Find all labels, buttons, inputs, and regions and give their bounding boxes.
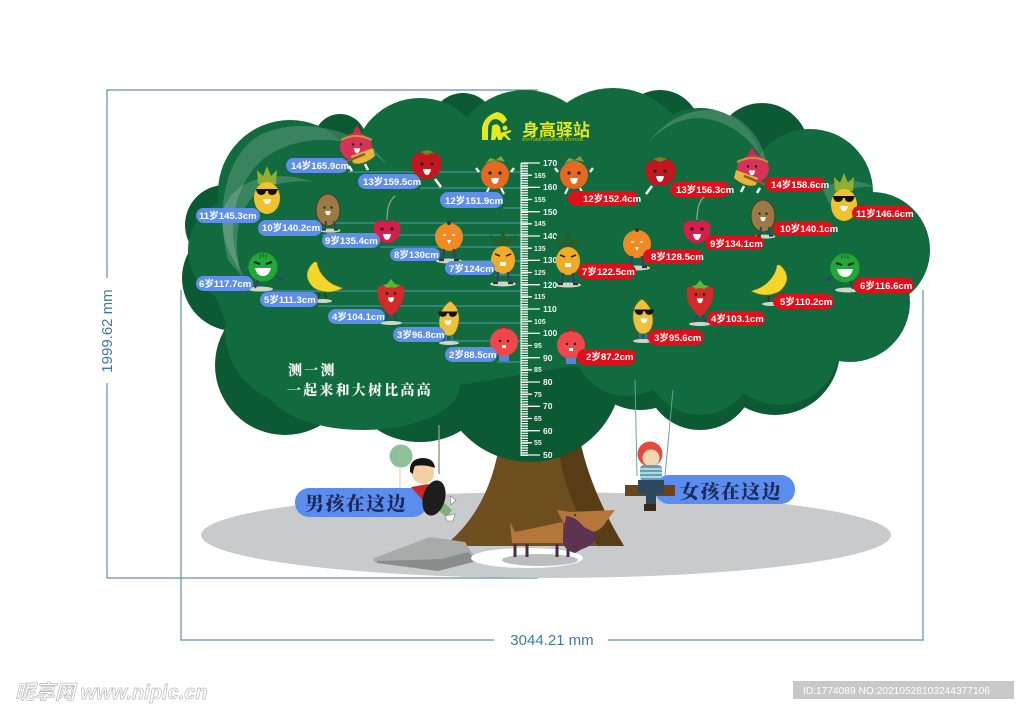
ruler numbers: 125 bbox=[534, 270, 546, 277]
tree trunk bbox=[444, 440, 624, 546]
fruit: persimmon bbox=[555, 156, 593, 194]
slogan text: 一起来和大树比高高 bbox=[287, 380, 433, 400]
width label: 3044.21 mm: 3044.21 mm bbox=[510, 632, 594, 649]
foliage highlights bbox=[222, 110, 875, 280]
label: 11岁: 11岁145.3cm bbox=[199, 210, 257, 222]
label: 9岁: 9岁135.4cm bbox=[325, 235, 378, 247]
logo subtitle: STATURE COURIER STATION bbox=[522, 137, 583, 142]
label: 4岁: 4岁103.1cm bbox=[711, 313, 764, 325]
watermark logo: 昵享网 www.nipic.cn bbox=[15, 681, 208, 704]
ruler numbers: 75 bbox=[534, 392, 542, 399]
ground bbox=[201, 492, 891, 578]
height connector lines bbox=[253, 172, 521, 362]
ruler numbers: 95 bbox=[534, 343, 542, 350]
label: 9岁: 9岁134.1cm bbox=[710, 238, 763, 250]
fruit: melon bbox=[247, 252, 283, 292]
height ruler bbox=[521, 158, 557, 460]
label: 2岁 bbox=[445, 347, 497, 362]
fruit: mango bbox=[633, 299, 654, 343]
badge: 女孩在这边: 女孩在这边 bbox=[680, 477, 782, 504]
fruit: orange bbox=[623, 228, 651, 270]
label: 3岁 bbox=[648, 330, 704, 345]
label: 6岁: 6岁117.7cm bbox=[199, 278, 251, 290]
panel: girls height labels bbox=[568, 177, 914, 365]
label: 12岁: 12岁152.4cm bbox=[583, 193, 641, 205]
label: 11岁: 11岁146.6cm bbox=[856, 208, 914, 220]
ruler numbers: 160 bbox=[543, 182, 557, 192]
fruit: cherry bbox=[374, 196, 400, 243]
badge: 男孩在这边: 男孩在这边 bbox=[305, 489, 407, 516]
panel: boys fruit characters bbox=[247, 125, 518, 361]
ruler numbers: 80 bbox=[543, 377, 553, 387]
logo icon bbox=[482, 112, 511, 140]
rock bbox=[373, 537, 477, 571]
label: 6岁: 6岁116.6cm bbox=[860, 280, 912, 292]
label: 7岁: 7岁122.5cm bbox=[582, 266, 635, 278]
foliage: light front layer bbox=[188, 88, 930, 430]
label: 13岁: 13岁159.5cm bbox=[363, 176, 421, 188]
fruit: persimmon bbox=[476, 156, 514, 194]
ruler numbers: 145 bbox=[534, 221, 546, 228]
ruler numbers: 65 bbox=[534, 416, 542, 423]
label: 5岁: 5岁111.3cm bbox=[264, 294, 316, 306]
fruit: tomato bbox=[557, 329, 585, 364]
ruler numbers: 120 bbox=[543, 280, 557, 290]
dog shadow bbox=[471, 548, 583, 568]
label: 10岁 bbox=[258, 220, 322, 236]
dimension lines bbox=[107, 90, 923, 640]
label: 10岁: 10岁140.2cm bbox=[262, 222, 320, 234]
fruit: strawberry bbox=[378, 279, 404, 325]
fruit: apple bbox=[411, 150, 441, 187]
label: 4岁 bbox=[328, 309, 385, 324]
ruler numbers: 90 bbox=[543, 353, 553, 363]
rope bbox=[438, 425, 440, 474]
fruit: kiwi bbox=[751, 200, 775, 239]
girl bbox=[638, 442, 664, 511]
label: 12岁 bbox=[440, 192, 503, 208]
label: 10岁: 10岁140.1cm bbox=[780, 223, 838, 235]
fruit: cherry bbox=[684, 196, 710, 243]
watermark id box: ID:1774089 NO:20210528103244377106 bbox=[803, 686, 990, 697]
label: 3岁: 3岁96.8cm bbox=[397, 329, 444, 341]
label: 14岁 bbox=[286, 158, 349, 173]
fruit: banana bbox=[307, 262, 343, 303]
label: 3岁 bbox=[393, 327, 445, 342]
ruler numbers: 70 bbox=[543, 401, 553, 411]
fruit: apple bbox=[646, 157, 676, 194]
label: 6岁 bbox=[196, 276, 253, 291]
ruler numbers: 55 bbox=[534, 440, 542, 447]
label: 7岁 bbox=[578, 264, 636, 279]
ruler numbers: 155 bbox=[534, 197, 546, 204]
fruit: pineapple with sunglasses bbox=[831, 173, 857, 221]
fruit: kiwi bbox=[316, 194, 340, 233]
ruler numbers: 85 bbox=[534, 367, 542, 374]
label: 5岁: 5岁110.2cm bbox=[780, 296, 832, 308]
fruit: pineapple with sunglasses bbox=[254, 166, 280, 214]
label: 7岁: 7岁124cm bbox=[449, 263, 494, 275]
ropes bbox=[635, 380, 673, 476]
label: 11岁 bbox=[196, 208, 260, 223]
girl on swing bbox=[625, 380, 675, 511]
ruler numbers: 165 bbox=[534, 173, 546, 180]
foliage: dark back layer bbox=[182, 90, 840, 462]
slogan text bbox=[287, 360, 433, 400]
label: 8岁 bbox=[643, 249, 704, 264]
fruit: mango bbox=[438, 301, 459, 345]
label: 14岁: 14岁158.6cm bbox=[771, 179, 829, 191]
panel: boys height labels bbox=[196, 158, 503, 362]
label: 2岁: 2岁87.2cm bbox=[586, 351, 633, 363]
badge: 女孩在这边 bbox=[655, 475, 795, 504]
fruit: orange bbox=[435, 221, 463, 264]
label: 2岁: 2岁88.5cm bbox=[449, 349, 496, 361]
ruler numbers: 110 bbox=[543, 304, 557, 314]
label: 5岁 bbox=[260, 292, 318, 307]
height label: 1999.62 mm: 1999.62 mm bbox=[99, 289, 116, 373]
ruler numbers: 115 bbox=[534, 294, 545, 301]
watermark id box bbox=[793, 681, 1014, 699]
fruit: dark pineapple bbox=[490, 230, 516, 286]
boy on tire swing bbox=[390, 425, 456, 521]
fruit: pomegranate bbox=[340, 125, 375, 171]
ruler numbers: 50 bbox=[543, 450, 553, 460]
label: 8岁: 8岁130cm bbox=[394, 249, 439, 261]
dog bbox=[510, 510, 615, 557]
ruler numbers: 150 bbox=[543, 207, 557, 217]
label: 13岁 bbox=[670, 182, 734, 197]
label: 4岁 bbox=[707, 311, 765, 326]
label: 3岁: 3岁95.6cm bbox=[654, 332, 701, 344]
label: 12岁: 12岁151.9cm bbox=[445, 195, 503, 207]
label: 10岁 bbox=[773, 221, 838, 236]
label: 4岁: 4岁104.1cm bbox=[332, 311, 385, 323]
label: 14岁: 14岁165.9cm bbox=[291, 160, 349, 172]
label: 5岁 bbox=[773, 294, 834, 309]
label: 13岁: 13岁156.3cm bbox=[676, 184, 734, 196]
fruit: dark pineapple bbox=[555, 231, 581, 288]
tire bbox=[419, 478, 449, 518]
tree foliage bbox=[182, 88, 930, 462]
ruler numbers: 130 bbox=[543, 255, 557, 265]
ruler numbers: 60 bbox=[543, 426, 553, 436]
fruit: banana bbox=[751, 265, 787, 306]
label: 8岁: 8岁128.5cm bbox=[651, 251, 704, 263]
label: 13岁 bbox=[358, 174, 421, 189]
ruler numbers: 170 bbox=[543, 158, 557, 168]
label: 9岁 bbox=[322, 233, 380, 248]
ruler ticks bbox=[521, 163, 528, 456]
label: 6岁 bbox=[853, 278, 914, 293]
ruler numbers bbox=[534, 158, 557, 460]
fruit: strawberry bbox=[687, 280, 713, 326]
ruler numbers: 135 bbox=[534, 246, 546, 253]
panel: girls fruit characters bbox=[555, 147, 861, 364]
fruit: tomato bbox=[490, 326, 518, 361]
logo: 身高驿站 bbox=[482, 112, 590, 142]
slogan text: 测一测 bbox=[288, 360, 337, 380]
label: 2岁 bbox=[577, 349, 636, 365]
label: 12岁 bbox=[568, 191, 641, 206]
ruler numbers: 105 bbox=[534, 319, 546, 326]
logo title: 身高驿站 bbox=[522, 120, 590, 140]
ruler numbers: 140 bbox=[543, 231, 557, 241]
ruler numbers: 100 bbox=[543, 328, 557, 338]
fruit: pomegranate bbox=[734, 147, 769, 193]
balloon bbox=[390, 444, 412, 488]
boy bbox=[410, 458, 456, 521]
swing seat bbox=[625, 485, 675, 496]
fruit: melon bbox=[825, 253, 861, 292]
